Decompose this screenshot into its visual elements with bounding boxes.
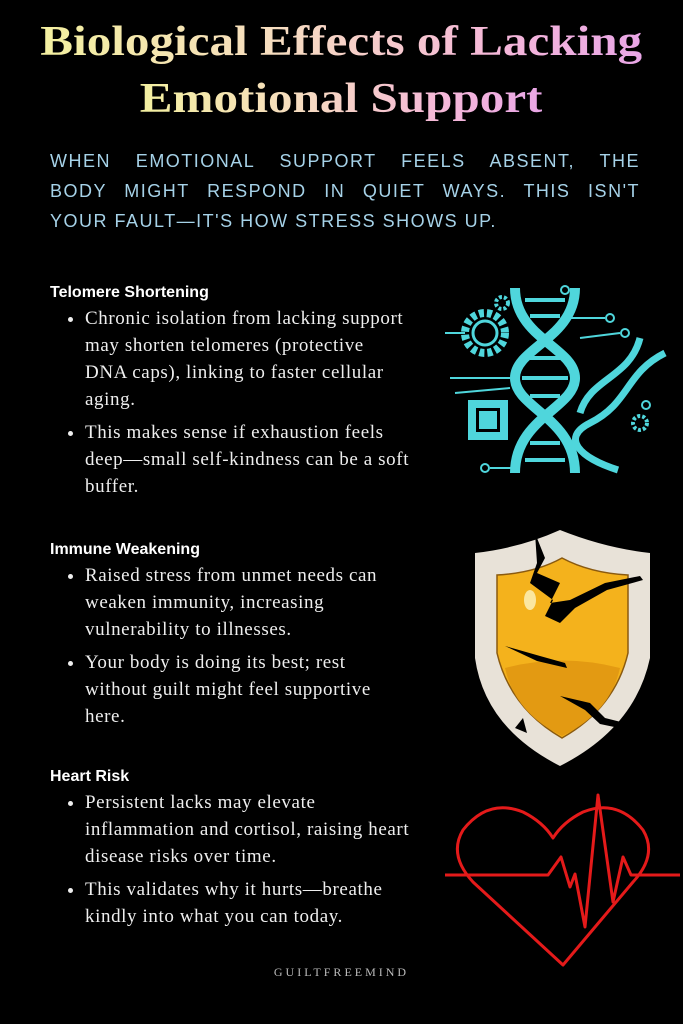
section: immune weakening: here.: [85, 706, 125, 727]
section: telomere shortening: may shorten telomeres (protective: [85, 335, 364, 356]
section: heart risk: This validates why it hurts—breathe: [85, 879, 382, 900]
section: heart risk: Heart Risk: [50, 768, 129, 785]
section: telomere shortening: [50, 284, 409, 497]
section: heart risk: kindly into what you can today.: [85, 906, 343, 927]
section: heart risk: inflammation and cortisol, raising heart: [85, 819, 409, 840]
section: telomere shortening: DNA caps), linking to faster cellular: [85, 362, 384, 383]
section: telomere shortening: This makes sense if exhaustion feels: [85, 422, 384, 443]
section: telomere shortening: Telomere Shortening: [50, 284, 209, 301]
title: [41, 19, 642, 122]
subtitle: YOUR FAULT—IT'S HOW STRESS SHOWS UP.: [50, 211, 497, 231]
icon: DNA circuit: [445, 285, 666, 474]
section: heart risk: Persistent lacks may elevate: [85, 792, 315, 813]
subtitle: BODY MIGHT RESPOND IN QUIET WAYS. THIS ISN'T: [50, 181, 640, 201]
section: immune weakening: Immune Weakening: [50, 541, 200, 558]
section: telomere shortening: aging.: [85, 389, 136, 410]
section: immune weakening: without guilt might feel supportive: [85, 679, 371, 700]
title: Emotional Support: [140, 76, 543, 122]
section: immune weakening: Your body is doing its best; rest: [85, 652, 346, 673]
section: immune weakening: [50, 541, 377, 727]
footer: GUILTFREEMIND: [274, 965, 409, 979]
section: telomere shortening: deep—small self-kindness can be a soft: [85, 449, 409, 470]
section: immune weakening: Raised stress from unmet needs can: [85, 565, 377, 586]
subtitle: WHEN EMOTIONAL SUPPORT FEELS ABSENT, THE: [50, 151, 640, 171]
section: heart risk: disease risks over time.: [85, 846, 277, 867]
icon: heart with pulse line: [445, 794, 680, 967]
subtitle: [50, 151, 640, 231]
title: Biological Effects of Lacking: [41, 19, 642, 65]
section: telomere shortening: Chronic isolation from lacking support: [85, 308, 403, 329]
icon: cracked shield: [475, 530, 650, 766]
section: heart risk: [50, 768, 409, 927]
section: telomere shortening: buffer.: [85, 476, 139, 497]
section: immune weakening: vulnerability to illnesses.: [85, 619, 292, 640]
section: immune weakening: weaken immunity, increasing: [85, 592, 324, 613]
